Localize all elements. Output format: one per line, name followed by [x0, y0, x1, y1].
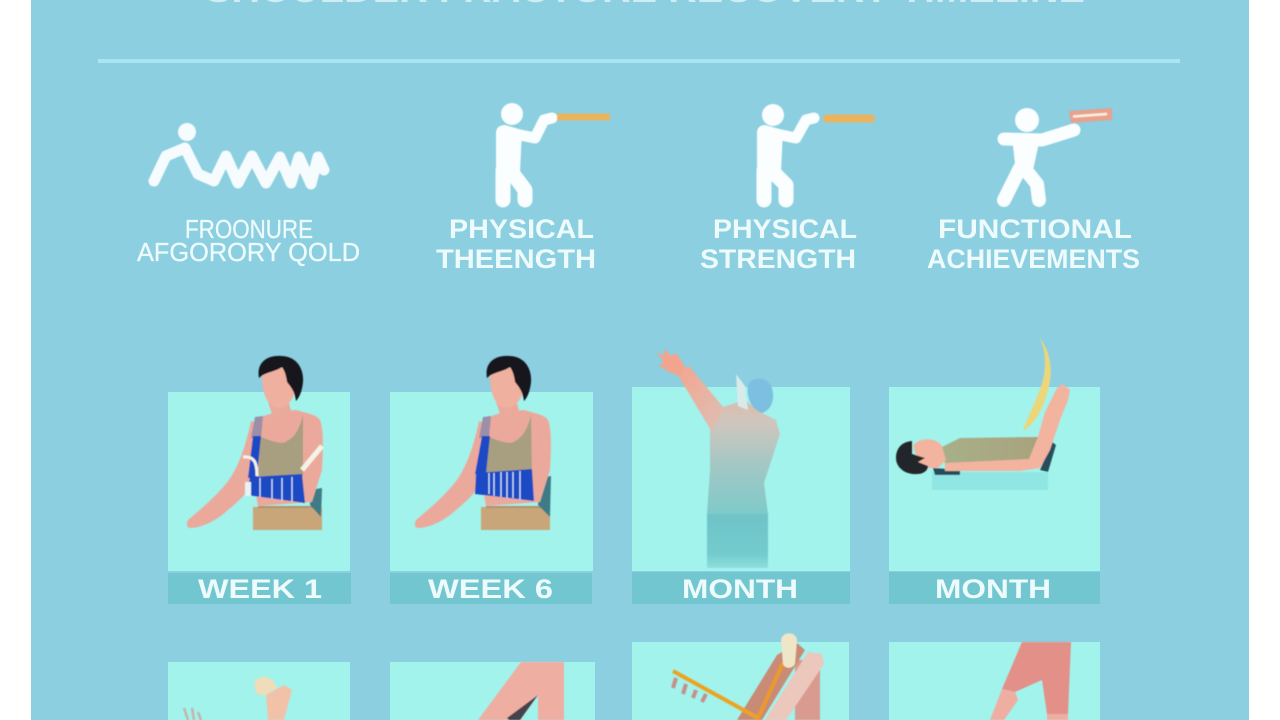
panel: week 6: [390, 356, 593, 604]
goal label: [436, 214, 596, 274]
label band: week 1: [168, 573, 351, 604]
goal label: FUNCTIONAL: [938, 214, 1132, 244]
icon: figure with bat: [757, 104, 875, 200]
illustration: person lying with raised arm: [896, 337, 1070, 490]
label band: month: [632, 572, 850, 604]
panel: month, arm raised: [632, 349, 850, 604]
goal label: STRENGTH: [700, 244, 856, 274]
panel: month, lying down: [889, 337, 1100, 604]
panel: lower row 2: [390, 662, 595, 720]
panel: week 1: [168, 356, 351, 604]
goal label: [700, 214, 857, 274]
goal column 3: [700, 104, 875, 274]
goal label: PHYSICAL: [713, 214, 857, 244]
label band: month: MONTH: [682, 574, 798, 604]
illustration: bent leg: [478, 662, 564, 720]
goal label: PHYSICAL: [449, 214, 594, 244]
divider line: [98, 59, 1180, 63]
goal column 4: [927, 108, 1140, 274]
goal column 1: [137, 123, 360, 267]
goal label: AFGORORY QOLD: [137, 237, 360, 267]
label band: week 6: WEEK 6: [428, 574, 553, 604]
goal label: [137, 214, 360, 267]
panel: lower row 3: [632, 633, 849, 720]
goal label: ACHIEVEMENTS: [927, 244, 1140, 274]
icon: crawling figure squiggle: [154, 123, 324, 184]
panel: lower row 4: [889, 642, 1100, 720]
label band: month: [889, 572, 1100, 604]
panel: lower row 1: [168, 662, 350, 720]
goal label: [927, 214, 1140, 274]
label band: week 1: WEEK 1: [198, 574, 322, 604]
illustration: arms with orange stick: [673, 633, 824, 720]
label band: week 6: [390, 573, 592, 604]
goal label: THEENGTH: [436, 244, 596, 274]
illustration: raised forearm: [184, 676, 292, 720]
label band: month: MONTH: [935, 574, 1051, 604]
illustration: person with arm sling, week 6: [415, 356, 551, 530]
goal label: FROONURE: [185, 214, 313, 244]
icon: figure lifting block: [1004, 108, 1112, 200]
illustration: person with arm sling, week 1: [187, 356, 323, 530]
icon: figure with bar: [496, 103, 610, 200]
illustration: standing legs: [990, 642, 1071, 720]
goal column 2: [436, 103, 610, 274]
illustration: person from behind raising arm: [656, 349, 780, 568]
